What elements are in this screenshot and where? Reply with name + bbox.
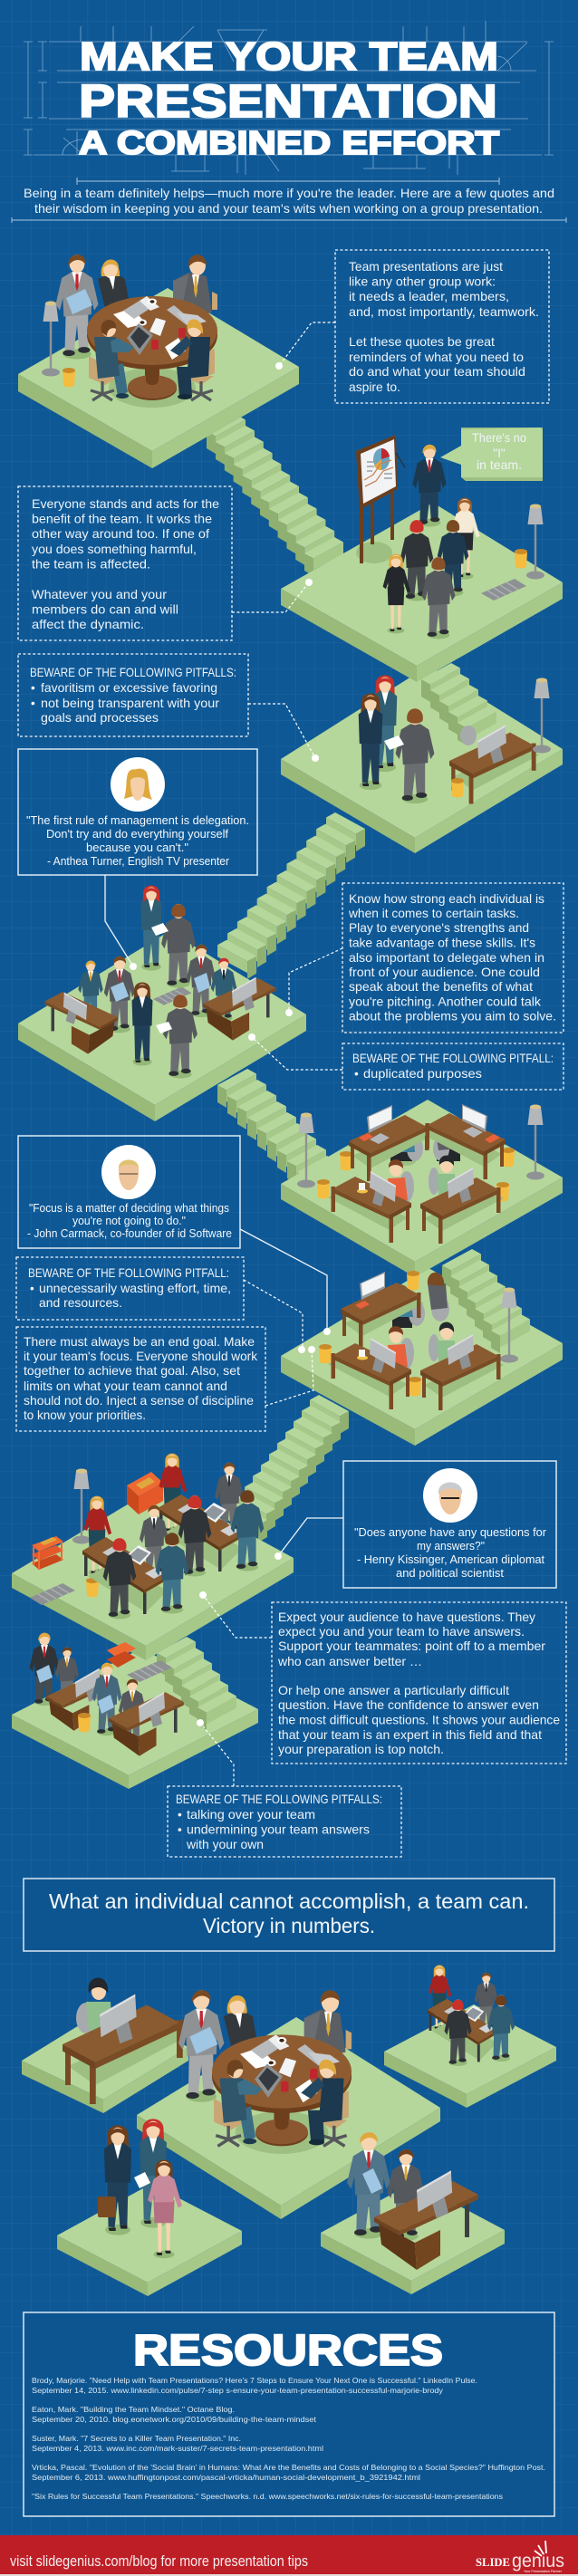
- banner: victory in numbers: What an individual cannot accomplish, a team can.: [49, 1889, 529, 1913]
- speech bubble: There's no I in team: in team.: [477, 458, 522, 472]
- callout: everyone stands and acts: the team is affected.: [32, 558, 150, 572]
- callout: team presentations: and, most importantly, teamwork.: [349, 305, 539, 319]
- quote box: Anthea Turner: because you can't.": [86, 841, 188, 854]
- resources panel: September 4, 2013. www.inc.com/mark-suster/7-secrets-team-presentation.html: [32, 2444, 323, 2453]
- resources panel: RESOURCES: [133, 2327, 443, 2375]
- callout: pitfalls favoritism: •: [31, 697, 35, 710]
- callout: everyone stands and acts: [18, 486, 232, 640]
- platform 5: [281, 1100, 563, 1277]
- platform 2: [281, 503, 563, 682]
- callout: pitfalls favoritism: •: [31, 681, 35, 695]
- callout: know how strong each individual is: front of your audience. One could: [349, 966, 540, 979]
- blueprint construction lines around title: [24, 21, 554, 175]
- resources panel: Vrticka, Pascal. "Evolution of the 'Social Brain' in Humans: What Are the Benefits and Costs of Belonging to a Social Species?" Huffington Post.: [32, 2463, 545, 2472]
- callout: end goal: to know your priorities.: [24, 1408, 146, 1422]
- scene: office desks on platform 5: [297, 1104, 544, 1244]
- icon: Anthea Turner avatar: [111, 757, 165, 812]
- callout: end goal: limits on what your team cannot and: [24, 1379, 227, 1393]
- title: A COMBINED EFFORT: [79, 124, 499, 161]
- callout: audience questions: Or help one answer a particularly difficult: [278, 1684, 509, 1697]
- callout: audience questions: question. Have the confidence to answer even: [278, 1698, 539, 1712]
- callout: team presentations: Team presentations are just: [349, 260, 503, 274]
- speech bubble: There's no I in team: [440, 428, 543, 481]
- quote box: Henry Kissinger: - Henry Kissinger, American diplomat: [357, 1553, 544, 1566]
- bottom platform: coder: [22, 1978, 188, 2113]
- callout: end goal: it your team's focus. Everyone should work: [24, 1350, 257, 1363]
- callout: know how strong each individual is: Play to everyone's strengths and: [349, 921, 529, 935]
- platform 3: [281, 666, 563, 853]
- callout: pitfall wasting effort: [16, 1257, 244, 1320]
- logo: SlideGenius: Your Presentation Partner: [524, 2570, 563, 2573]
- banner: victory in numbers: [24, 1879, 554, 1951]
- bottom platform: handshake group: [57, 2119, 242, 2296]
- quote box: Anthea Turner: [18, 749, 257, 875]
- callout: everyone stands and acts: benefit of the team. It works the: [32, 513, 212, 526]
- callout: pitfall duplicated purposes: [342, 1043, 564, 1090]
- quote box: Henry Kissinger: "Does anyone have any questions for: [354, 1526, 546, 1539]
- scene: colleagues exchanging papers on platform 3: [359, 675, 551, 804]
- callout: pitfall wasting effort: •: [30, 1282, 34, 1295]
- callout: team presentations: aspire to.: [349, 380, 400, 394]
- title: PRESENTATION: [79, 75, 497, 127]
- stairs from platform 2 to 3: [421, 663, 496, 745]
- scene: presenter and audience on platform 2: [356, 435, 544, 639]
- callout: pitfall wasting effort: and resources.: [39, 1296, 122, 1310]
- callout: pitfalls talking over: •: [178, 1808, 182, 1821]
- quote box: John Carmack: [18, 1136, 240, 1248]
- callout: everyone stands and acts: you does something harmful,: [32, 543, 197, 556]
- callout: end goal: should not do. Inject a sense of discipline: [24, 1394, 254, 1408]
- quote box: John Carmack: you're not going to do.": [72, 1215, 186, 1227]
- banner: victory in numbers: Victory in numbers.: [203, 1914, 375, 1937]
- logo: SlideGenius: genius: [512, 2551, 564, 2571]
- resources panel: September 6, 2013. www.huffingtonpost.com/pascal-vrticka/human-social-development_b_3921942.html: [32, 2473, 420, 2482]
- callout: team presentations: Let these quotes be great: [349, 335, 495, 349]
- callout: everyone stands and acts: Whatever you and your: [32, 588, 167, 601]
- callout: pitfall duplicated purposes: •: [354, 1067, 359, 1081]
- resources panel: [24, 2312, 554, 2516]
- callout: know how strong each individual is: Know how strong each individual is: [349, 892, 544, 906]
- quote box: Henry Kissinger: and political scientist: [396, 1567, 505, 1580]
- title: MAKE YOUR TEAM: [80, 34, 498, 79]
- callout: pitfalls favoritism: goals and processes: [41, 711, 159, 725]
- icon: Henry Kissinger avatar: [423, 1468, 477, 1523]
- callout: audience questions: who can answer better …: [277, 1655, 422, 1668]
- quote box: Anthea Turner: "The first rule of management is delegation.: [26, 814, 249, 827]
- callout: pitfalls favoritism: BEWARE OF THE FOLLOWING PITFALLS:: [30, 666, 236, 679]
- callout: pitfall wasting effort: BEWARE OF THE FOLLOWING PITFALL:: [28, 1266, 229, 1280]
- quote box: Anthea Turner: Don't try and do everything yourself: [46, 828, 229, 841]
- scene: office desks on platform 6: [319, 1271, 518, 1410]
- speech bubble: There's no I in team: "I": [493, 447, 506, 460]
- connectors with dots: [105, 322, 343, 1786]
- intro text: their wisdom in keeping you and your team's wits when working on a group presentation.: [34, 202, 543, 216]
- callout: know how strong each individual is: when it comes to certain tasks.: [348, 907, 519, 920]
- callout: audience questions: the most difficult questions. It shows your audience: [278, 1714, 560, 1726]
- scene: desks and team on platform 4: [45, 886, 275, 1079]
- callout: pitfalls favoritism: [18, 654, 248, 736]
- dimension lines: [12, 178, 566, 223]
- callout: team presentations: it needs a leader, members,: [349, 290, 509, 303]
- intro text: Being in a team definitely helps—much more if you're the leader. Here are a few quotes and: [24, 187, 554, 200]
- callout: end goal: [16, 1327, 265, 1431]
- callout: pitfalls talking over: BEWARE OF THE FOLLOWING PITFALLS:: [176, 1793, 382, 1806]
- callout: pitfalls talking over: [168, 1786, 401, 1857]
- icon: John Carmack avatar: [101, 1145, 156, 1199]
- title: [79, 34, 499, 161]
- resources panel: September 14, 2015. www.linkedin.com/pulse/7-step s-ensure-your-team-presentation-successful-marjorie-brody: [32, 2386, 444, 2395]
- stairs from platform 7 to 8: [157, 1637, 236, 1730]
- callout: pitfalls favoritism: not being transparent with your: [41, 697, 219, 710]
- platform 4: [18, 931, 306, 1121]
- callout: pitfall wasting effort: unnecessarily wasting effort, time,: [39, 1282, 231, 1295]
- logo: SlideGenius: SLIDE: [476, 2556, 510, 2569]
- platform 8: [12, 1648, 258, 1789]
- callout: everyone stands and acts: Everyone stands and acts for the: [32, 497, 219, 511]
- callout: audience questions: your preparation is top notch.: [278, 1743, 444, 1756]
- callout: audience questions: expect you and your team to have answers.: [278, 1625, 525, 1639]
- callout: team presentations: like any other group work:: [349, 275, 496, 289]
- speech bubble: There's no I in team: There's no: [472, 431, 526, 445]
- callout: team presentations: reminders of what you need to: [349, 351, 524, 364]
- callout: know how strong each individual is: [342, 883, 564, 1033]
- resources panel: Brody, Marjorie. "Need Help with Team Presentations? Here's 7 Steps to Ensure Your Next One is Successful." LinkedIn Pulse.: [32, 2376, 477, 2385]
- callout: know how strong each individual is: also important to delegate when in: [349, 951, 544, 965]
- callout: pitfalls favoritism: favoritism or excessive favoring: [41, 681, 217, 695]
- callout: everyone stands and acts: members do can and will: [32, 603, 178, 617]
- quote box: John Carmack: - John Carmack, co-founder of id Software: [27, 1227, 232, 1240]
- platform 1: [18, 288, 299, 468]
- logo: SlideGenius: [476, 2541, 564, 2573]
- quote box: Anthea Turner: - Anthea Turner, English TV presenter: [47, 855, 229, 868]
- callout: pitfalls talking over: with your own: [186, 1838, 264, 1851]
- scene: standing work tables on platform 7: [30, 1454, 264, 1619]
- callout: know how strong each individual is: about the problems you aim to solve.: [349, 1009, 556, 1024]
- bottom platform: team at tables: [384, 1965, 556, 2108]
- callout: pitfalls talking over: undermining your team answers: [187, 1822, 370, 1837]
- quote box: Henry Kissinger: my answers?": [417, 1540, 485, 1552]
- callout: end goal: There must always be an end goal. Make: [24, 1335, 255, 1349]
- callout: team presentations: do and what your team should: [349, 365, 525, 379]
- scene: round table meeting on platform 1: [42, 255, 217, 408]
- footer bar: [0, 2535, 578, 2576]
- callout: audience questions: [272, 1602, 566, 1764]
- callout: end goal: together to achieve that goal. Also, set: [24, 1364, 240, 1378]
- callout: team presentations: [335, 250, 549, 403]
- bottom platform: desk workers: [321, 2132, 505, 2294]
- callout: audience questions: that your team is an expert in this field and that: [278, 1728, 542, 1742]
- callout: pitfall duplicated purposes: duplicated purposes: [363, 1067, 482, 1081]
- callout: pitfalls talking over: •: [178, 1822, 182, 1837]
- callout: everyone stands and acts: affect the dynamic.: [32, 618, 144, 631]
- callout: know how strong each individual is: take advantage of these skills. It's: [349, 937, 535, 949]
- resources panel: Eaton, Mark. "Building the Team Mindset." Octane Blog.: [32, 2405, 235, 2414]
- callout: know how strong each individual is: speak about the benefits of what: [349, 980, 533, 994]
- platform 6: [281, 1268, 563, 1446]
- resources panel: "Six Rules for Successful Team Presentations." Speechworks. n.d. www.speechworks.net/six-rules-for-successful-team-presentations: [32, 2492, 503, 2501]
- intro text: [24, 187, 554, 216]
- callout: everyone stands and acts: other way around too. If one of: [32, 527, 209, 541]
- callout: audience questions: Expect your audience to have questions. They: [278, 1610, 535, 1624]
- footer bar: visit slidegenius.com/blog for more presentation tips: [10, 2553, 308, 2570]
- stairs from platform 5 to 6: [442, 1249, 530, 1353]
- scene: solid desks on platform 8: [30, 1633, 184, 1756]
- bottom platform: round table meeting: [137, 1990, 440, 2219]
- quote box: John Carmack: "Focus is a matter of deciding what things: [29, 1202, 229, 1215]
- resources panel: September 20, 2010. blog.eonetwork.org/2010/09/building-the-team-mindset: [32, 2415, 317, 2424]
- platform 7: [12, 1485, 294, 1660]
- callout: pitfalls talking over: talking over your team: [187, 1808, 315, 1821]
- callout: audience questions: Support your teammates: point off to a member: [278, 1639, 545, 1653]
- resources panel: Suster, Mark. "7 Secrets to a Killer Team Presentation." Inc.: [32, 2434, 241, 2443]
- stair flights behind platforms: [207, 415, 365, 1543]
- callout: know how strong each individual is: you're pitching. Another could talk: [349, 995, 541, 1009]
- quote box: Henry Kissinger: [343, 1461, 556, 1588]
